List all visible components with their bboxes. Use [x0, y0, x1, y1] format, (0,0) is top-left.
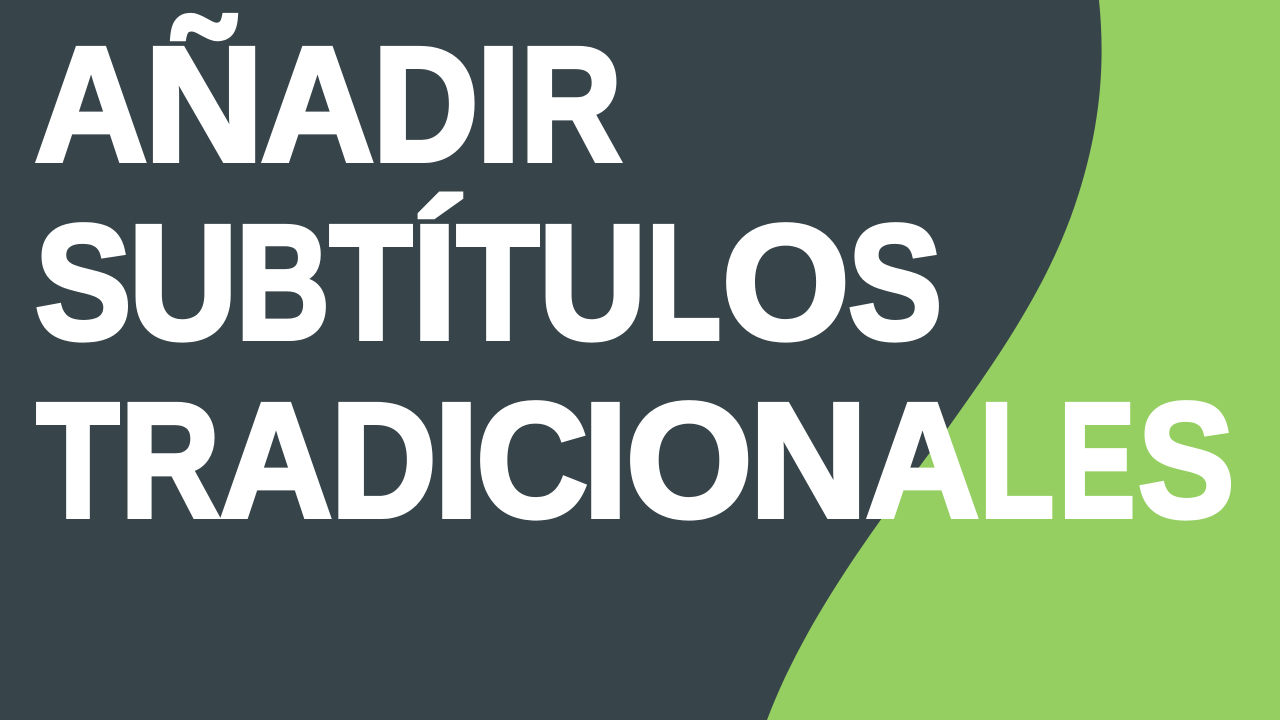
- title: [34, 12, 1234, 552]
- title line 2: U: [539, 190, 646, 374]
- green curved panel: [767, 0, 1280, 720]
- title line 2: S: [848, 190, 942, 374]
- title line 2: T: [457, 190, 539, 374]
- title line 3: A: [866, 368, 980, 552]
- title line 1: A: [260, 12, 374, 196]
- title line 2: L: [647, 190, 721, 374]
- title line 1: D: [373, 12, 478, 196]
- title line 3: L: [980, 368, 1054, 552]
- title line 3: I: [583, 368, 628, 552]
- title line 2: O: [722, 190, 850, 374]
- title line 3: R: [120, 368, 220, 552]
- title line 3: N: [750, 368, 868, 552]
- title line 1: Ñ: [144, 12, 264, 196]
- title line 3: E: [1059, 368, 1135, 552]
- title line 2: S: [35, 190, 132, 374]
- title line 3: A: [220, 368, 332, 552]
- title line 3: O: [626, 368, 753, 552]
- title line 2: B: [236, 190, 330, 374]
- title line 3: C: [476, 368, 588, 552]
- title line 3: I: [434, 368, 479, 552]
- title line 3: S: [1138, 368, 1234, 552]
- title line 1: R: [520, 12, 622, 196]
- title line 2: T: [330, 190, 412, 374]
- title line 2: U: [129, 190, 238, 374]
- title line 3: T: [37, 368, 119, 552]
- title line 2: Í: [412, 190, 461, 374]
- title line 1: I: [476, 12, 521, 196]
- title line 3: D: [331, 368, 436, 552]
- title line 1: A: [34, 12, 148, 196]
